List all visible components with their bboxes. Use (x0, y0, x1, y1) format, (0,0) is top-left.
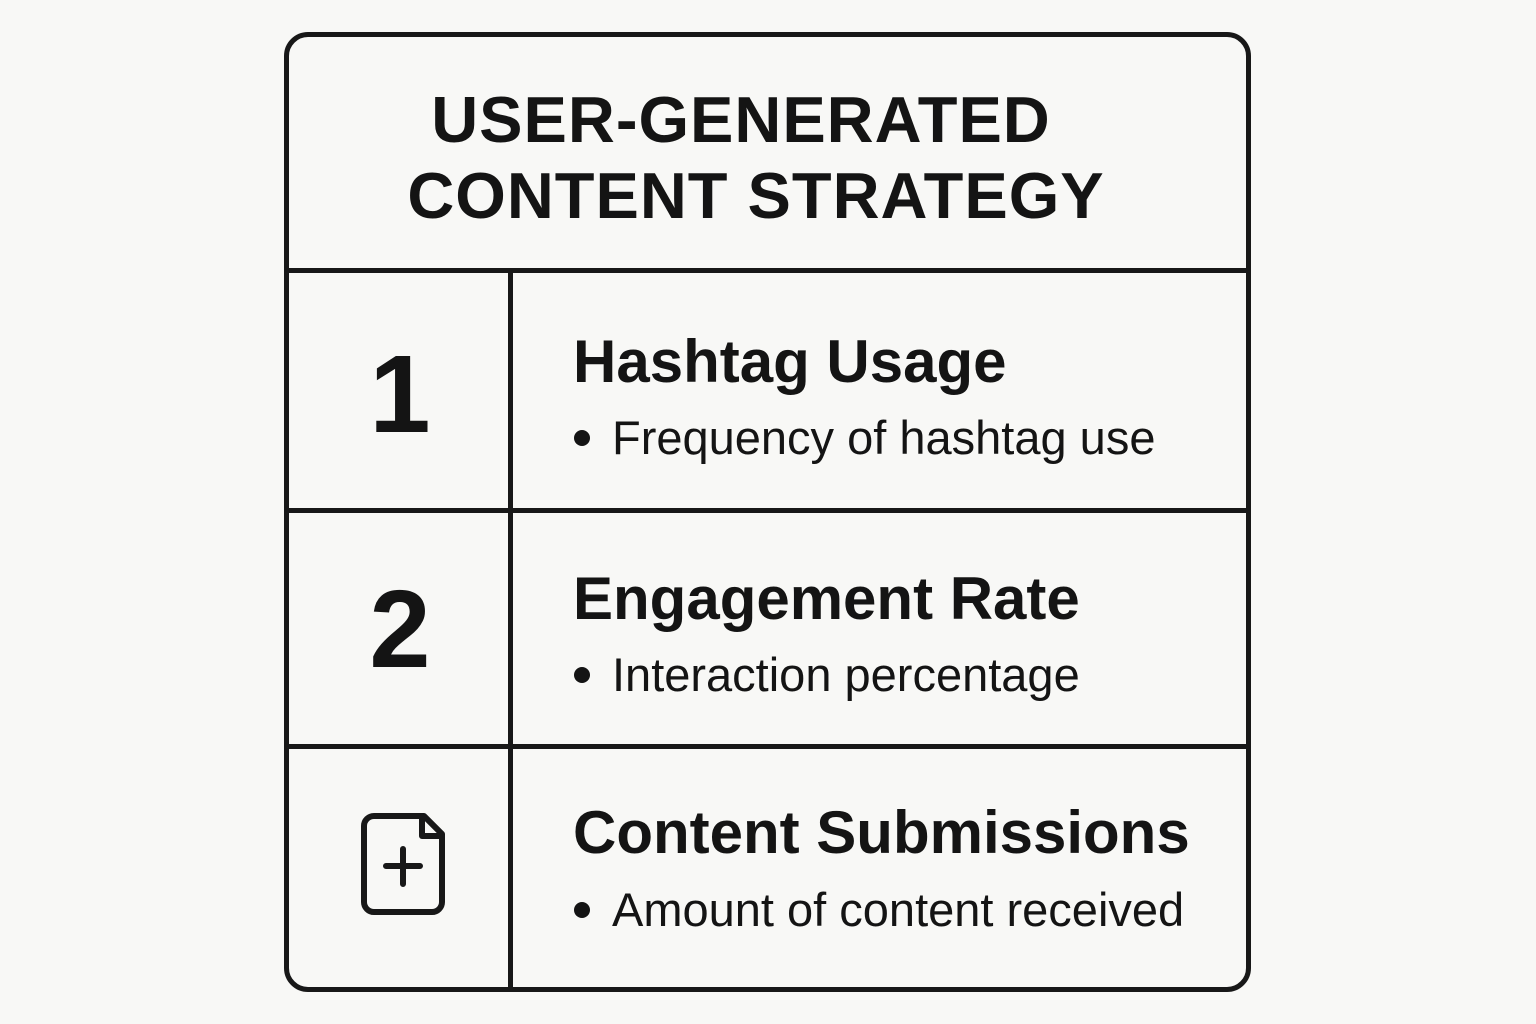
bullet: content amount: Amount of content received (612, 883, 1184, 936)
title: CONTENT STRATEGY (407, 159, 1105, 232)
number 2: 2 (369, 568, 431, 691)
bullet: hashtag frequency: Frequency of hashtag use (612, 411, 1155, 464)
title (407, 83, 1105, 232)
heading: Content Submissions: Content Submissions (573, 799, 1190, 866)
bullet: interaction: Interaction percentage (612, 648, 1080, 701)
heading: Engagement Rate: Engagement Rate (573, 565, 1080, 632)
number 1: 1 (369, 333, 431, 456)
heading: Hashtag Usage: Hashtag Usage (573, 328, 1006, 395)
icon: document plus (361, 813, 445, 915)
title: USER-GENERATED (431, 83, 1051, 156)
panel: main table (284, 32, 1251, 992)
